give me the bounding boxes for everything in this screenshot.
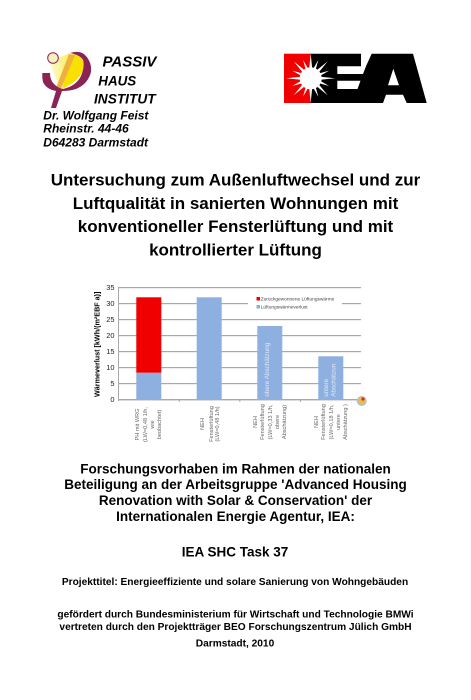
y-axis labels: 10 [106, 363, 114, 372]
bar: obere Abschätzung [257, 326, 282, 400]
subtitle: research project: Beteiligung an der Arbeitsgruppe 'Advanced Housing [64, 477, 407, 492]
x-axis label: NEH Fensterlüftung: (LW=0,48 1/h) [215, 406, 221, 442]
y-axis labels: 15 [106, 347, 114, 356]
subtitle: research project [64, 461, 407, 524]
x-axis label: obere Abschätzung: NEH [253, 416, 259, 428]
bar: untere Abschätzung: untere [323, 378, 330, 397]
x-axis label: untere Abschätzung: untere [336, 414, 342, 430]
bar chart [92, 283, 367, 442]
address block: Dr. Wolfgang Feist [43, 108, 149, 122]
x-axis label: untere Abschätzung: Fensterlüftung [321, 404, 327, 440]
legend [248, 293, 342, 311]
project title: Projekttitel: Energieeffiziente und solare Sanierung von Wohngebäuden [62, 577, 408, 588]
x-axis label: obere Abschätzung: Abschätzung) [282, 405, 288, 439]
x-axis label: PH mit WRG: (LW=0,48 1/h, [143, 407, 149, 442]
y-axis labels: 5 [110, 379, 114, 388]
title [51, 171, 421, 260]
x-axis label: untere Abschätzung [314, 404, 349, 440]
place and date: Darmstadt, 2010 [196, 639, 275, 650]
x-axis label: untere Abschätzung: NEH [314, 416, 320, 428]
subtitle: research project: Forschungsvorhaben im Rahmen der nationalen [80, 461, 391, 476]
x-axis label: obere Abschätzung: (LW=0,33 1/h, [268, 404, 274, 439]
x-axis label: PH mit WRG: PH mit WRG [135, 408, 141, 441]
bar: obere Abschätzung: obere Abschätzung [264, 342, 271, 397]
y-axis title: Wärmeverlust [kWh/(m²EBF a)] [92, 292, 101, 397]
logo text: Passiv Haus Institut: INSTITUT [94, 91, 157, 106]
logo text: Passiv Haus Institut: HAUS [98, 73, 136, 88]
logo text: Passiv Haus Institut: PASSIV [102, 54, 158, 71]
funding text: vertreten durch den Projektträger BEO Forschungszentrum Jülich GmbH [59, 622, 412, 633]
address block: D64283 Darmstadt [43, 136, 149, 150]
title: Untersuchung zum Außenluftwechsel und zur [51, 171, 421, 190]
x-axis label: NEH Fensterlüftung: Fensterlüftung [209, 406, 215, 442]
y-axis labels: 20 [106, 331, 114, 340]
x-axis label: untere Abschätzung: (LW=0,18 1/h, [329, 404, 335, 439]
x-axis label: obere Abschätzung: Fensterlüftung [260, 404, 266, 440]
logo: IEA [284, 53, 427, 103]
x-axis label: PH mit WRG [135, 407, 163, 442]
legend: Zurückgewonnene Lüftungswärme [261, 296, 335, 302]
bar: NEH Fensterlüftung [197, 297, 222, 400]
bar: PH mit WRG [136, 297, 161, 400]
title: kontrollierter Lüftung [149, 241, 322, 260]
logo text: Passiv Haus Institut [94, 54, 158, 106]
legend: Lüftungswärmeverlust [261, 304, 308, 310]
logo: Passivhaus Institut [42, 52, 91, 108]
x-axis label: obere Abschätzung: obere [275, 415, 281, 429]
address block: Rheinstr. 44-46 [43, 122, 129, 136]
x-axis label: NEH Fensterlüftung: NEH [200, 418, 206, 430]
y-axis labels: 30 [106, 299, 114, 308]
y-axis labels: 35 [106, 283, 114, 292]
x-axis label: NEH Fensterlüftung [200, 406, 221, 442]
y-axis labels: 0 [110, 395, 114, 404]
x-axis label: PH mit WRG: beobachtet) [157, 410, 163, 439]
address block [43, 108, 149, 150]
y-axis labels [106, 283, 114, 404]
subtitle: research project: Internationalen Energie Agentur, IEA: [116, 509, 355, 524]
funding text [57, 610, 414, 633]
bar: untere Abschätzung: Abschätzun [330, 363, 337, 397]
subtitle: research project: Renovation with Solar & Conservation' der [99, 493, 373, 508]
y-axis labels: 25 [106, 315, 114, 324]
task heading: IEA SHC Task 37 [182, 545, 288, 560]
funding text: gefördert durch Bundesministerium für Wirtschaft und Technologie BMWi [57, 610, 414, 621]
x-axis label: PH mit WRG: wie [150, 420, 156, 430]
title: konventioneller Fensterlüftung und mit [78, 217, 394, 236]
bar: untere Abschätzung [318, 356, 343, 400]
x-axis label: obere Abschätzung [253, 404, 288, 440]
x-axis label: untere Abschätzung: Abschätzung ) [343, 404, 349, 440]
title: Luftqualität in sanierten Wohnungen mit [73, 194, 399, 213]
icon: pin marker [357, 396, 367, 406]
